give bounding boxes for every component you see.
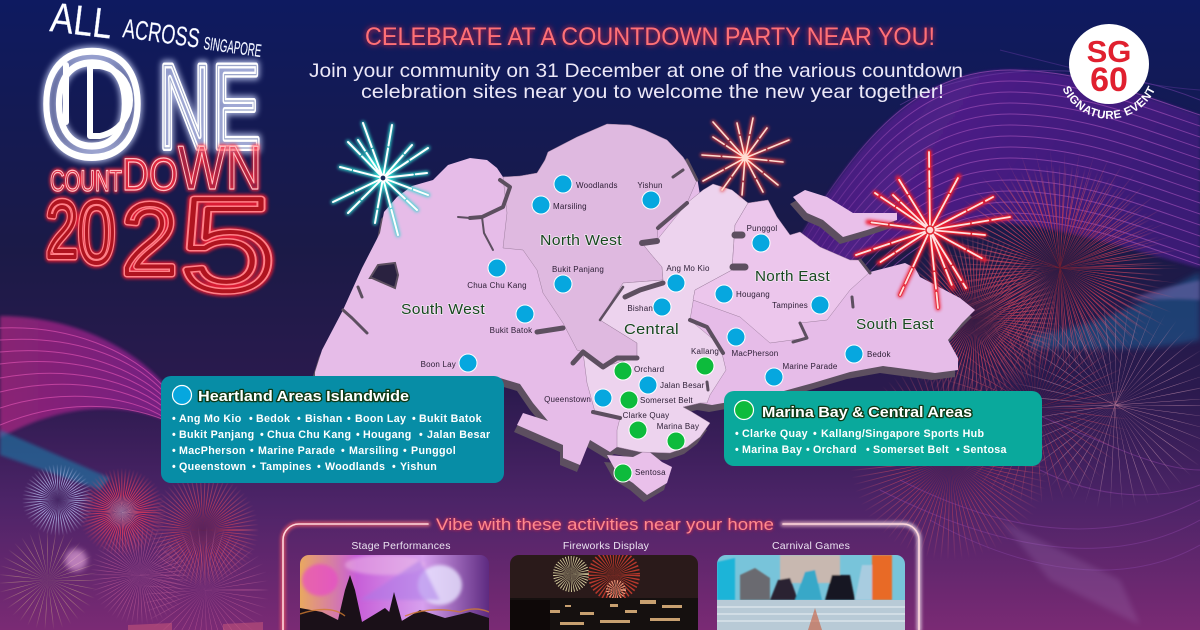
panel list: heartland sites: Bishan — [305, 413, 343, 425]
panel list: heartland sites: • — [297, 413, 301, 425]
map: Sentosa and offshore islands — [607, 190, 897, 495]
logo word: Countdown glow: COUNT — [50, 165, 122, 198]
map region labels — [401, 232, 935, 338]
logo word: Countdown: DO — [122, 149, 178, 200]
map region labels: North East — [755, 268, 831, 285]
map place labels: Bedok — [867, 350, 891, 359]
logo word: ONE glow — [40, 20, 261, 188]
panel list: heartland sites: • — [392, 461, 396, 473]
panel list: heartland sites: Marsiling — [349, 445, 399, 457]
map place labels: Marina Bay — [657, 422, 699, 431]
logo number: 2025 — [46, 171, 275, 318]
intro text: Join your community on 31 December at one of the various countdown — [309, 60, 963, 82]
panel list: heartland sites: • — [260, 429, 264, 441]
map: coastline shadow — [312, 131, 972, 502]
logo number: 2025 glow — [46, 171, 275, 318]
panel list: central sites: Kallang/Singapore Sports Hub — [821, 428, 985, 440]
logo number: 2025: 2 — [122, 184, 177, 296]
firework: red burst — [856, 152, 1010, 308]
map place labels: Sentosa — [635, 468, 666, 477]
neon frame — [283, 524, 919, 630]
panel list: central sites: • — [735, 444, 739, 456]
activities section — [283, 515, 919, 630]
map place labels: Orchard — [634, 365, 664, 374]
map place labels: Woodlands — [576, 181, 618, 190]
activity: carnival games: Carnival Games — [772, 540, 850, 552]
logo number: 2025 glow: 2 — [46, 185, 78, 274]
panel list: heartland sites: • — [317, 461, 321, 473]
logo number: 2025: 0 — [78, 185, 115, 281]
logo word: Countdown glow — [50, 134, 262, 203]
panel list: heartland sites: • — [341, 445, 345, 457]
map region labels: South West — [401, 301, 486, 318]
panel list: central sites: • — [806, 444, 810, 456]
SG60 signature event logo — [1063, 24, 1154, 119]
fireworks: large red right background — [900, 208, 1167, 510]
panel list: heartland sites — [172, 413, 491, 473]
map place labels: Chua Chu Kang — [467, 281, 527, 290]
map place labels: Jalan Besar — [660, 381, 705, 390]
skyline silhouette bottom left — [128, 622, 263, 630]
panel list: heartland sites: Bukit Panjang — [179, 429, 254, 441]
panel list: central sites: Sentosa — [963, 444, 1008, 456]
intro text — [309, 60, 963, 103]
activity: carnival games — [717, 540, 905, 630]
panel legend pin: blue — [172, 386, 192, 404]
map place labels: Bukit Batok — [490, 326, 533, 335]
logo text: All Across Singapore — [48, 0, 263, 61]
activity: stage performances: Stage Performances — [351, 540, 451, 552]
logo word: ONE glow: NE — [158, 40, 261, 174]
intro text: celebration sites near you to welcome the new year together! — [361, 81, 944, 103]
panel list: heartland sites: • — [172, 461, 176, 473]
fireworks: bottom left background — [23, 482, 237, 622]
map region labels: Central — [624, 321, 679, 338]
map place labels: Tampines — [772, 301, 808, 310]
panel list: central sites: Orchard — [813, 444, 857, 456]
map place labels: Bishan — [627, 304, 653, 313]
map region labels: South East — [856, 316, 935, 333]
panel list: heartland sites: • — [250, 445, 254, 457]
logo word: Countdown: COUNT — [50, 165, 122, 198]
panel list: heartland sites: Yishun — [400, 461, 437, 473]
panel list: heartland sites: • — [172, 413, 176, 425]
panel list: heartland sites: • — [172, 445, 176, 457]
SG60 signature event logo: 60 — [1090, 61, 1128, 99]
map place labels: Marsiling — [553, 202, 587, 211]
panel list: central sites: • — [735, 428, 739, 440]
logo word: Countdown glow: WN — [178, 134, 262, 203]
panel list: central sites: • — [956, 444, 960, 456]
map region: North West — [503, 124, 697, 367]
logo word: Countdown — [50, 134, 262, 203]
logo number: 2025: 5 — [180, 171, 275, 318]
map place labels: Yishun — [637, 181, 663, 190]
panel legend pin: green — [734, 400, 754, 420]
panel: Marina Bay and Central Areas — [724, 391, 1042, 466]
panel list: central sites: Marina Bay — [742, 444, 802, 456]
logo word: Countdown: WN — [178, 134, 262, 203]
panel list: heartland sites: Chua Chu Kang — [267, 429, 351, 441]
panel list: heartland sites: • — [419, 429, 423, 441]
panel list: heartland sites: Ang Mo Kio — [179, 413, 242, 425]
panel list: heartland sites: MacPherson — [179, 445, 246, 457]
map place labels: MacPherson — [732, 349, 778, 358]
map place labels: Boon Lay — [421, 360, 456, 369]
activity: stage performances — [300, 540, 489, 630]
panel list: heartland sites: • — [412, 413, 416, 425]
map place labels: Queenstown — [544, 395, 591, 404]
panel list: central sites: • — [813, 428, 817, 440]
panel list: central sites: • — [866, 444, 870, 456]
logo number: 2025: 2 — [46, 185, 78, 274]
panel list: heartland sites: • — [249, 413, 253, 425]
panel list: heartland sites: • — [172, 429, 176, 441]
logo word: ONE glow: O — [40, 20, 144, 188]
panel list: central sites: Somerset Belt — [873, 444, 949, 456]
firework: white burst — [333, 123, 428, 235]
panel title: Marina Bay and Central Areas: Marina Bay & Central Areas — [762, 405, 972, 421]
map place labels: Hougang — [736, 290, 770, 299]
panel list: heartland sites: Queenstown — [179, 461, 246, 473]
map place labels: Punggol — [747, 224, 777, 233]
panel list: heartland sites: Boon Lay — [355, 413, 406, 425]
map place labels: Bukit Panjang — [552, 265, 604, 274]
panel title: Heartland Areas Islandwide: Heartland Areas Islandwide — [198, 389, 409, 405]
panel list: central sites — [735, 428, 1008, 456]
panel list: heartland sites: Bedok — [256, 413, 290, 425]
background: pink light waves left — [0, 316, 165, 490]
firework: peach burst — [702, 118, 789, 195]
map place labels: Somerset Belt — [640, 396, 693, 405]
activities heading: Vibe with these activities near your home — [436, 515, 774, 534]
map region: North East — [693, 200, 870, 343]
map pins: heartland locations — [459, 175, 863, 407]
logo number: 2025: 5 — [180, 171, 275, 318]
logo number: 2025 glow: 0 — [78, 185, 115, 281]
map place labels: Marine Parade — [782, 362, 838, 371]
panel list: heartland sites: • — [403, 445, 407, 457]
logo text: All Across Singapore: SINGAPORE — [202, 33, 263, 61]
map place labels: Clarke Quay — [623, 411, 669, 420]
logo number: 2025: 0 — [78, 185, 115, 281]
main heading: CELEBRATE AT A COUNTDOWN PARTY NEAR YOU! — [365, 23, 935, 51]
map place labels — [421, 181, 891, 477]
main heading: CELEBRATE AT A COUNTDOWN PARTY NEAR YOU! — [365, 23, 935, 51]
logo number: 2025 glow: 2 — [122, 184, 177, 296]
panel list: heartland sites: • — [252, 461, 256, 473]
neon logo: One Countdown 2025 — [40, 0, 275, 318]
logo text: All Across Singapore: ACROSS — [121, 13, 202, 54]
panel list: heartland sites: Tampines — [260, 461, 312, 473]
activity: fireworks display: Fireworks Display — [563, 540, 650, 552]
panel list: heartland sites: • — [347, 413, 351, 425]
activities heading: Vibe with these activities near your home — [436, 515, 774, 534]
logo word: ONE: O — [40, 20, 144, 188]
map: island base — [315, 124, 975, 465]
background: purple light waves right — [780, 50, 1200, 625]
logo number: 2025: 2 — [122, 184, 177, 296]
panel list: heartland sites: Bukit Batok — [419, 413, 482, 425]
map region: Central — [583, 184, 748, 453]
SG60 signature event logo: SG — [1087, 34, 1131, 69]
map place labels: Kallang — [691, 347, 719, 356]
panel: Heartland Areas Islandwide — [161, 376, 504, 483]
activity: fireworks display — [510, 540, 698, 630]
panel list: heartland sites: Punggol — [411, 445, 456, 457]
map pins: Marina Bay and central locations — [614, 357, 714, 482]
panel list: heartland sites: Marine Parade — [258, 445, 335, 457]
logo word: ONE: NE — [158, 40, 261, 174]
logo word: ONE: NE — [158, 40, 261, 174]
panel list: heartland sites: Jalan Besar — [427, 429, 491, 441]
map of Singapore — [312, 124, 975, 502]
map region labels: North West — [540, 232, 623, 249]
SG60 signature event logo: SIGNATURE EVENT — [1063, 86, 1154, 119]
logo number: 2025: 2 — [46, 185, 78, 274]
logo number: 2025 glow: 5 — [180, 171, 275, 318]
panel list: central sites: Clarke Quay — [742, 428, 808, 440]
panel list: heartland sites: Woodlands — [325, 461, 385, 473]
map: coastal inlets and rivers — [343, 160, 870, 418]
panel list: heartland sites: Hougang — [363, 429, 412, 441]
logo word: ONE — [40, 20, 261, 188]
map place labels: Ang Mo Kio — [666, 264, 710, 273]
logo word: Countdown glow: DO — [122, 149, 178, 200]
panel list: heartland sites: • — [356, 429, 360, 441]
